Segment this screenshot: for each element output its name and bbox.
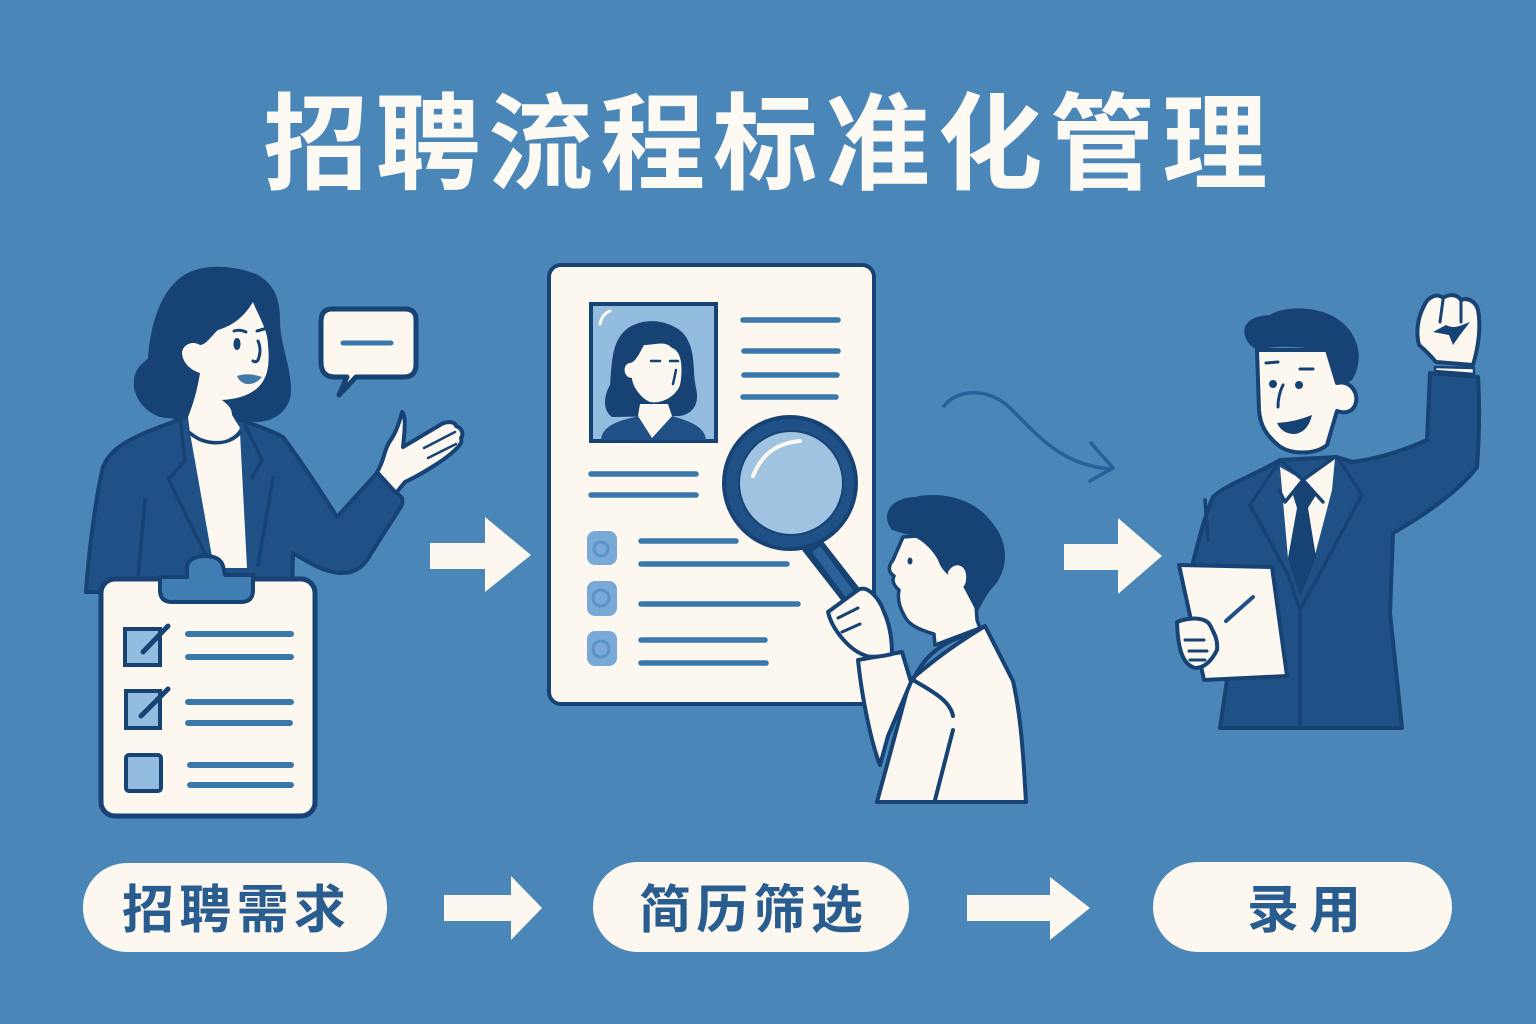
resume text lines (591, 320, 838, 663)
arrow: step 2 to step 3 (1064, 518, 1162, 594)
speech bubble (321, 309, 416, 395)
man mouth (1277, 415, 1312, 434)
man hand (1177, 619, 1217, 668)
step pill: requirements (83, 863, 387, 952)
woman hair (134, 267, 291, 422)
man face (1257, 350, 1356, 452)
reviewer ear (948, 565, 966, 589)
man shirt (1280, 458, 1335, 558)
man facial features (1266, 362, 1313, 407)
step pill: screening (593, 862, 909, 952)
reviewer body (877, 626, 1026, 802)
man tie (1288, 482, 1316, 597)
man cuff (1435, 367, 1474, 374)
illustration: reviewer with magnifier (828, 495, 1026, 802)
curved arrow (944, 393, 1113, 481)
man paper (1179, 565, 1287, 680)
woman jacket (86, 417, 402, 592)
woman mouth (237, 374, 262, 384)
arrow: pill 2 to pill 3 (967, 877, 1090, 940)
illustration: woman presenting requirements (86, 267, 462, 592)
illustration: hired man celebrating (1177, 295, 1479, 728)
title: 招聘流程标准化管理 (263, 87, 1275, 204)
magnifying glass (724, 417, 858, 604)
step pill: requirements: 招聘需求 (122, 882, 351, 940)
step pill: screening: 简历筛选 (639, 882, 868, 940)
arrow: step 1 to step 2 (430, 517, 531, 592)
step pill: hire: 录用 (1247, 882, 1371, 940)
checklist row 3 (126, 755, 291, 791)
reviewer arm (858, 652, 911, 765)
arrow: pill 1 to pill 2 (444, 876, 542, 940)
reviewer hair (887, 495, 1005, 613)
checklist row 2 (126, 689, 291, 728)
reviewer face (889, 535, 980, 645)
step pill: hire (1153, 862, 1452, 952)
woman face and neck (182, 302, 269, 441)
resume document (549, 265, 874, 704)
man raised fist (1417, 295, 1479, 365)
clipboard clip (160, 556, 253, 602)
man collar and lapels (1205, 457, 1362, 725)
woman shirt (190, 433, 247, 568)
woman facial features (138, 329, 273, 578)
reviewer hand (828, 589, 892, 657)
man hair (1244, 308, 1359, 384)
resume photo (591, 304, 716, 441)
woman hand (377, 412, 462, 493)
clipboard checklist (101, 556, 315, 816)
resume bullets (587, 531, 617, 666)
checklist row 1 (125, 626, 291, 665)
man suit (1193, 373, 1479, 728)
